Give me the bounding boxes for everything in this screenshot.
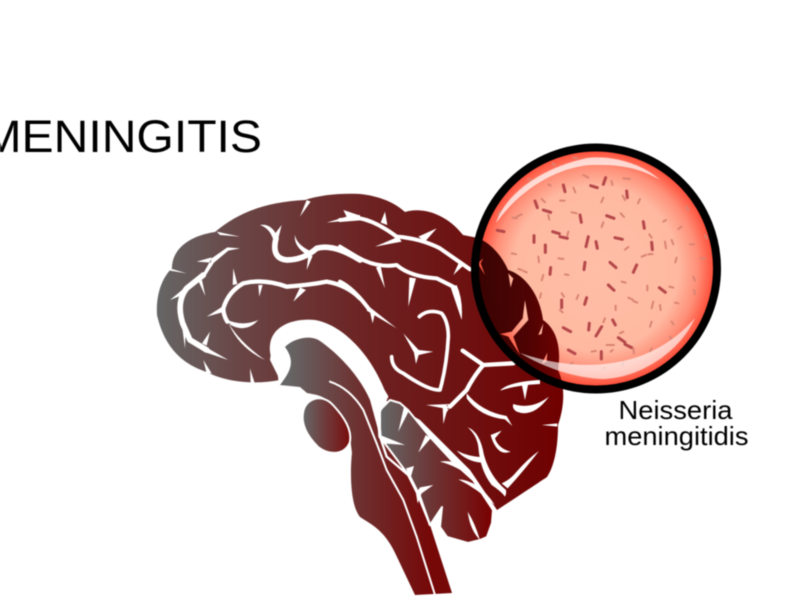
label: Neisseria meningitidis: [604, 395, 748, 451]
brain illustration: [157, 194, 563, 595]
pons: [303, 398, 350, 453]
magnifier lens with bacteria: [475, 148, 717, 390]
highlight: top glare: [496, 157, 660, 223]
lens ring: [475, 148, 717, 390]
bacteria: Neisseria meningitidis: [497, 158, 707, 368]
cerebrum: [157, 194, 563, 510]
sulci: frontal: [170, 200, 360, 384]
lens fill: [475, 148, 717, 390]
label: Neisseria meningitidis: Neisseria: [618, 395, 733, 425]
darkened brain inside the lens: [478, 240, 554, 376]
sulci: parietal and temporal: [340, 210, 549, 417]
sulci: occipital and cerebellum: [330, 380, 557, 595]
label: Neisseria meningitidis: meningitidis: [604, 421, 748, 451]
cerebellum: [380, 400, 493, 543]
corpus callosum: [270, 320, 387, 413]
highlight: bottom glare: [520, 318, 695, 379]
brainstem: [280, 338, 452, 595]
